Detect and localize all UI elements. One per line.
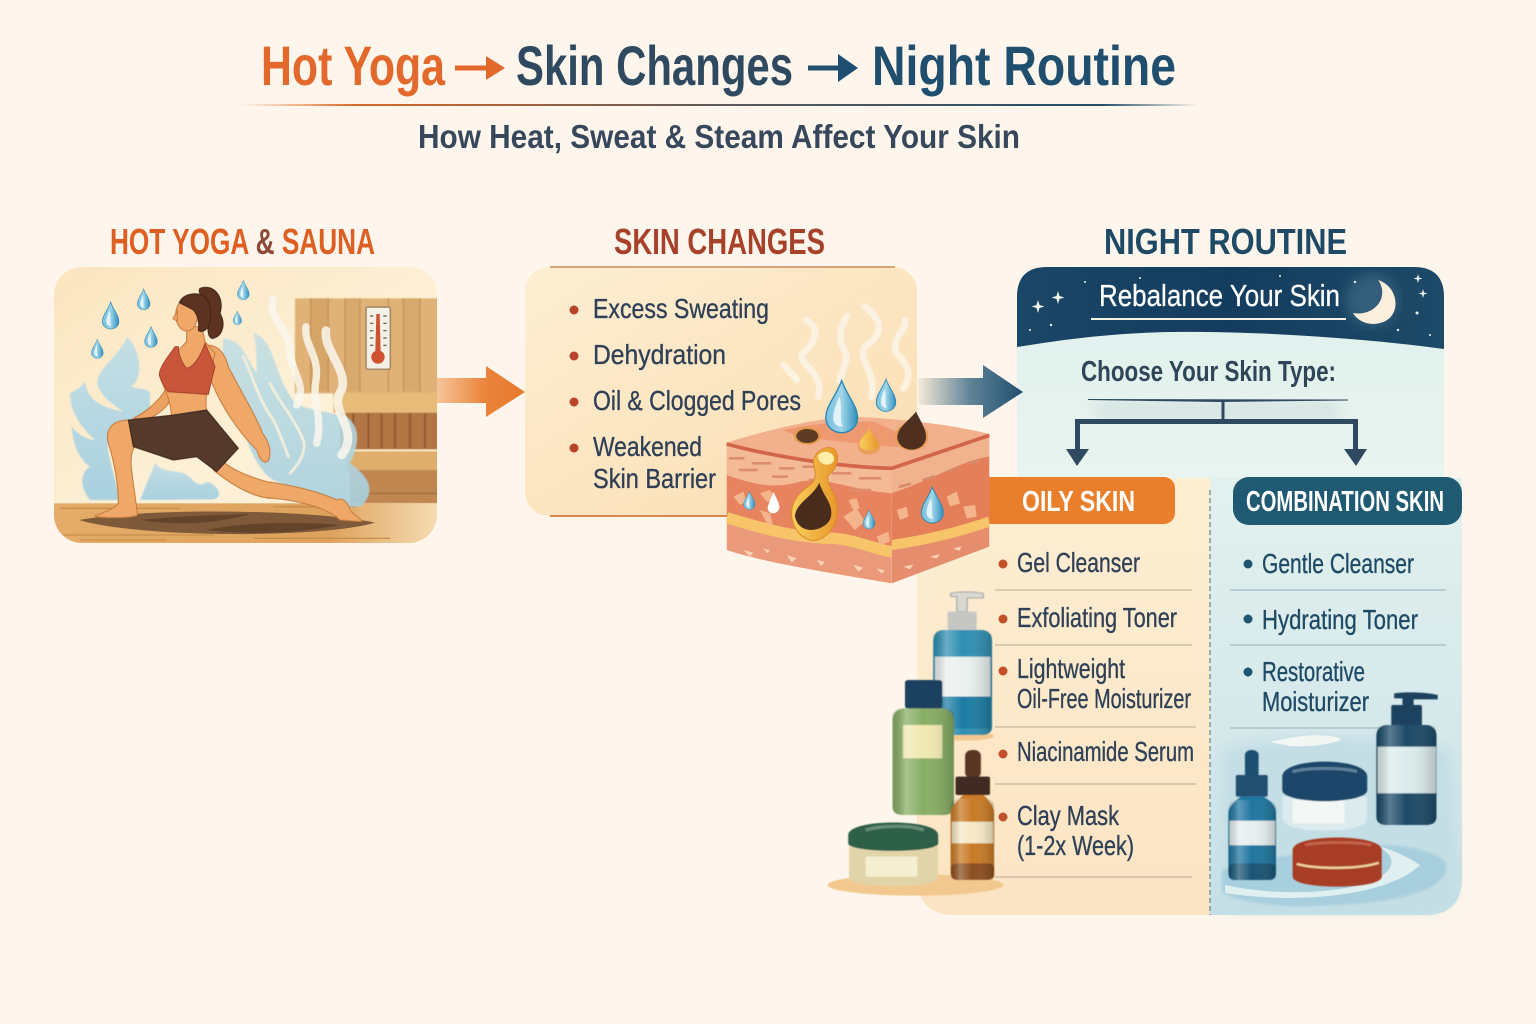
list: skin changes: Excess Sweating xyxy=(593,293,769,324)
steam wisps xyxy=(783,307,908,397)
list: combination skin: Moisturizer xyxy=(1262,686,1369,717)
blackheads xyxy=(794,412,928,451)
steam: white wisps xyxy=(272,299,348,455)
skin block: left face xyxy=(723,440,893,587)
sweat drops xyxy=(91,280,249,358)
list: oily skin: (1-2x Week) xyxy=(1017,830,1134,861)
label: oily skin xyxy=(975,477,1175,524)
heading: hot yoga and sauna: HOT YOGA & SAUNA xyxy=(110,221,375,262)
pump bottle: navy xyxy=(1376,692,1438,825)
heading: night routine: NIGHT ROUTINE xyxy=(1104,221,1347,262)
label: combination skin: COMBINATION SKIN xyxy=(1246,486,1444,518)
list: oily skin: Oil-Free Moisturizer xyxy=(1017,683,1191,714)
list: oily skin: Clay Mask xyxy=(1017,800,1120,831)
combination products background swirl xyxy=(1222,735,1456,910)
pump bottle: blue xyxy=(933,592,992,735)
night header xyxy=(1017,267,1444,349)
list: combination skin: Restorative xyxy=(1262,656,1365,687)
water drops xyxy=(744,379,943,529)
arrow: skin changes to night routine xyxy=(918,365,1023,418)
list: skin changes: Dehydration xyxy=(593,339,726,370)
products: oily skin xyxy=(827,592,1003,896)
title: hot yoga: Hot Yoga xyxy=(261,34,446,97)
connector arrows xyxy=(1066,400,1367,466)
dropper bottle: amber xyxy=(951,750,994,880)
skin block: top face xyxy=(727,417,989,468)
dropper bottle: blue xyxy=(1228,750,1276,880)
panel: hot yoga and sauna illustration xyxy=(54,267,438,545)
list: combination skin: Hydrating Toner xyxy=(1262,604,1418,635)
sauna wall xyxy=(295,298,438,503)
list: oily skin: Gel Cleanser xyxy=(1017,547,1140,578)
steam: cream gaps xyxy=(243,357,304,473)
list: oily skin xyxy=(995,547,1196,877)
list: skin changes: Skin Barrier xyxy=(593,463,716,494)
jar: green lid xyxy=(848,822,938,886)
clogged pore with oil xyxy=(792,448,838,541)
list: combination skin xyxy=(1230,548,1446,728)
skin block: right face xyxy=(890,432,992,585)
bottle: green xyxy=(893,680,954,815)
label: combination skin xyxy=(1233,477,1462,525)
arrow: title first xyxy=(455,56,505,80)
heading: skin changes: SKIN CHANGES xyxy=(614,221,825,262)
list: oily skin: Niacinamide Serum xyxy=(1017,736,1194,767)
yoga mat xyxy=(79,512,375,534)
title xyxy=(261,34,1176,97)
jar: red lid xyxy=(1293,837,1382,887)
subtitle: How Heat, Sweat & Steam Affect Your Skin xyxy=(418,118,1020,155)
illustration: skin cross-section xyxy=(723,307,992,587)
prompt: choose your skin type: Choose Your Skin Type: xyxy=(1081,356,1336,388)
list: skin changes: Oil & Clogged Pores xyxy=(593,385,801,416)
column: combination skin xyxy=(1210,478,1462,915)
panel: night routine xyxy=(827,267,1462,915)
icon: thermometer xyxy=(366,307,390,369)
divider xyxy=(1209,490,1211,915)
list: oily skin: Lightweight xyxy=(1017,653,1125,684)
jar: navy lid xyxy=(1282,762,1367,831)
list: combination skin: Gentle Cleanser xyxy=(1262,548,1414,579)
woman in lunge pose xyxy=(95,287,362,522)
panel body xyxy=(1017,320,1444,500)
panel: skin changes xyxy=(525,267,917,516)
column: oily skin xyxy=(917,478,1210,915)
list: skin changes xyxy=(570,293,801,494)
icon: crescent moon xyxy=(1353,280,1396,324)
floor xyxy=(54,503,437,545)
arrow: hot yoga to skin changes xyxy=(437,366,525,417)
steam: blue flames xyxy=(70,333,369,507)
title: night routine: Night Routine xyxy=(872,34,1176,97)
title: skin changes: Skin Changes xyxy=(516,34,793,97)
list: oily skin: Exfoliating Toner xyxy=(1017,602,1177,633)
products: combination skin xyxy=(1228,692,1438,887)
list: skin changes: Weakened xyxy=(593,431,702,462)
header text: Rebalance Your Skin xyxy=(1099,278,1340,313)
label: oily skin: OILY SKIN xyxy=(1022,486,1135,518)
oil drop xyxy=(858,427,880,455)
arrow: title second xyxy=(808,54,858,82)
